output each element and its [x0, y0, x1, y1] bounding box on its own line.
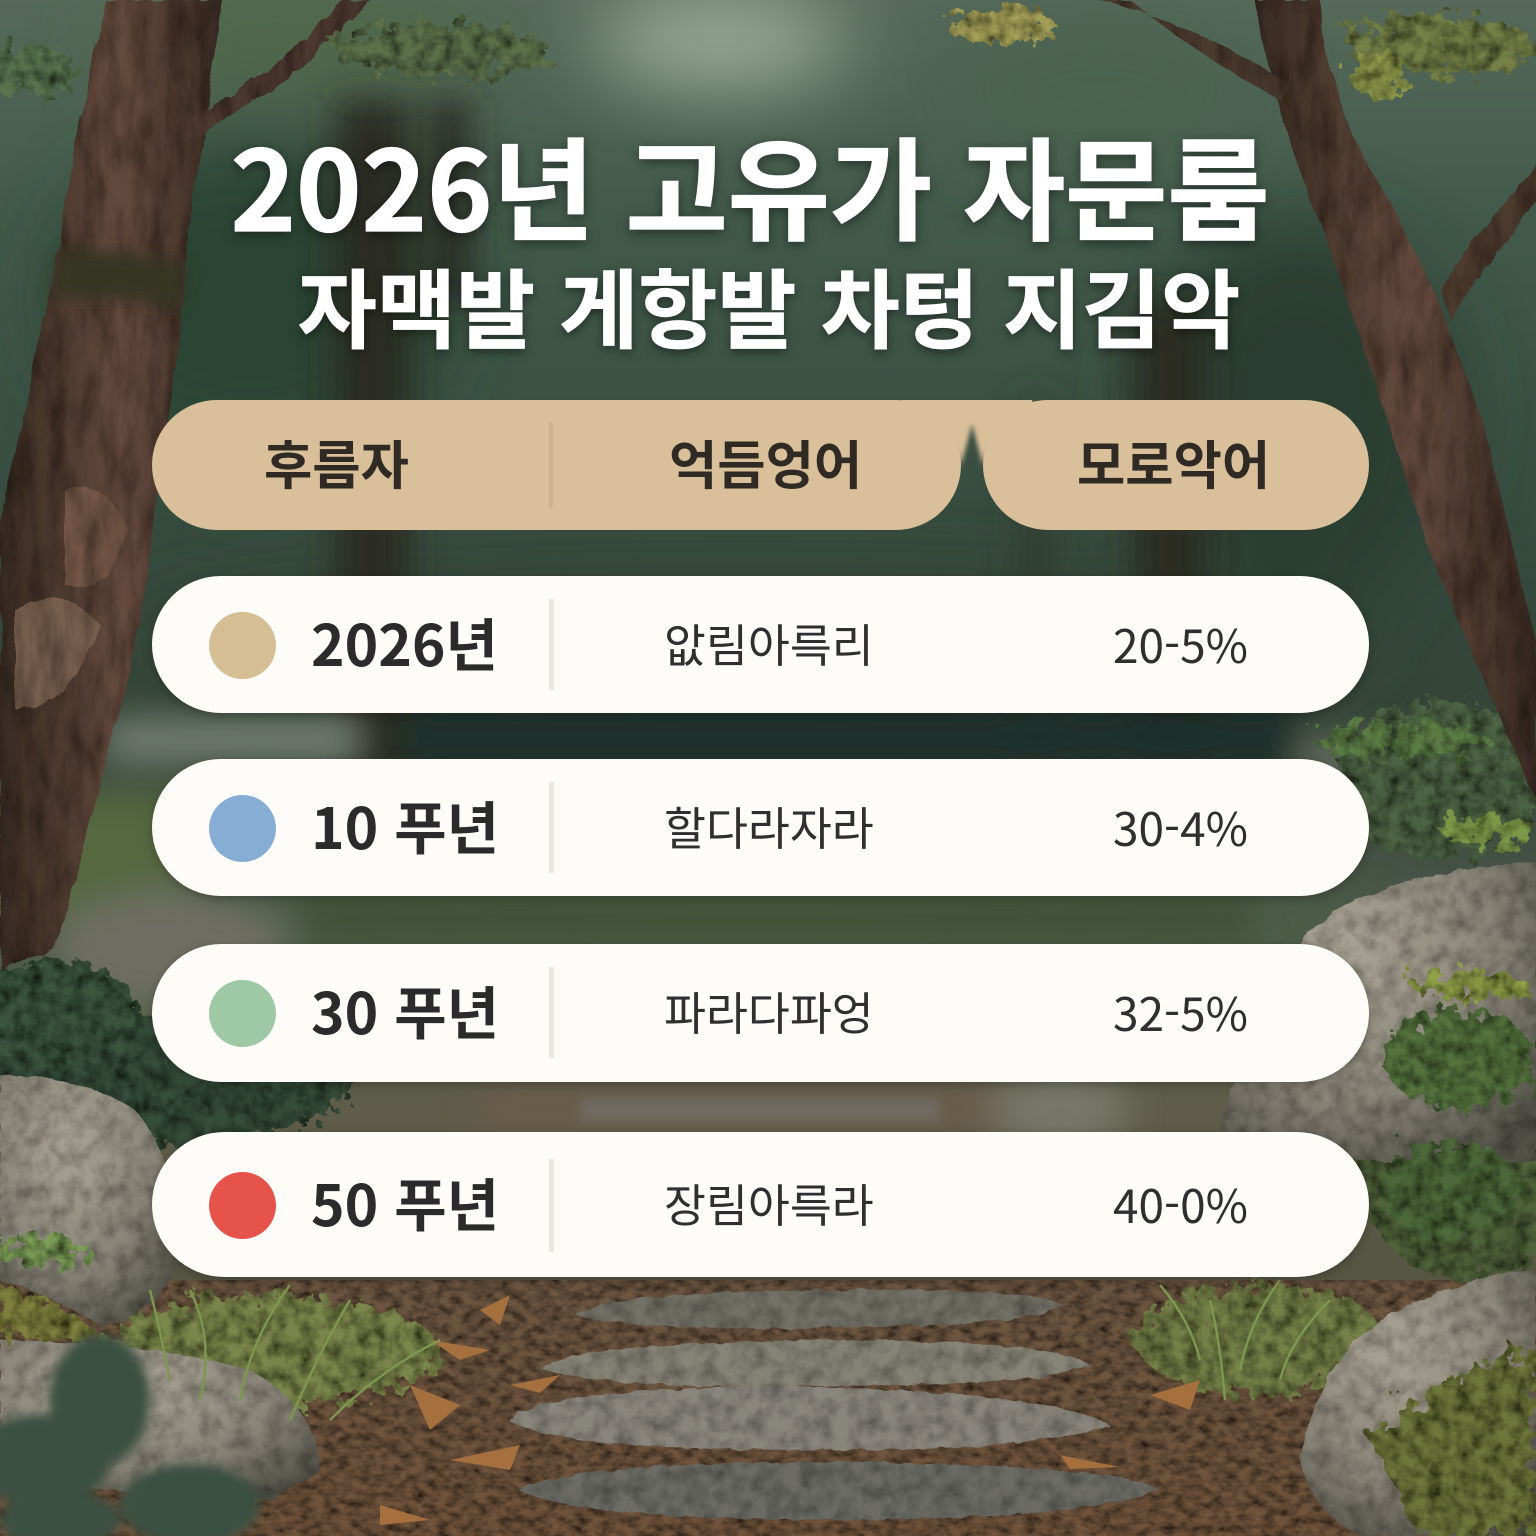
row label: 30 푸년	[311, 969, 499, 1051]
left tree	[0, 0, 1536, 970]
canopy leaves	[0, 7, 1535, 99]
row percent: 30-4%	[1113, 794, 1248, 860]
row: 50 푸년	[152, 1132, 1369, 1277]
title: 2026년 고유가 자문룸	[231, 102, 1269, 263]
row label: 2026년	[311, 601, 498, 683]
row percent: 32-5%	[1113, 979, 1248, 1045]
row label: 50 푸년	[311, 1161, 499, 1243]
row name: 앖림아륵리	[664, 610, 874, 676]
row: 10 푸년	[152, 759, 1369, 896]
distant stepping stones	[580, 1098, 940, 1122]
foreground plants	[0, 1335, 260, 1536]
rocks	[0, 862, 1536, 1536]
row label: 10 푸년	[311, 784, 499, 866]
green dot	[209, 980, 276, 1047]
header label: 후름자: 후름자	[264, 424, 409, 500]
leaves on path	[380, 1295, 1200, 1525]
header bridge	[902, 400, 1035, 466]
tan dot	[209, 612, 276, 679]
row name: 장림아륵라	[664, 1170, 874, 1236]
subtitle: 자맥발 게항발 차텅 지김악	[298, 241, 1240, 366]
row percent: 40-0%	[1113, 1171, 1248, 1237]
table header bar	[152, 400, 1369, 530]
row name: 파라다파엉	[664, 978, 874, 1044]
header label: 억듬엉어: 억듬엉어	[669, 424, 862, 500]
header label: 모로악어: 모로악어	[1077, 424, 1270, 500]
row: 30 푸년	[152, 944, 1369, 1082]
row percent: 20-5%	[1113, 611, 1248, 677]
blue dot	[209, 795, 276, 862]
header divider	[549, 422, 553, 508]
header pill: right column	[983, 400, 1369, 530]
red dot	[209, 1172, 276, 1239]
row name: 할다라자라	[664, 793, 874, 859]
ground	[0, 1280, 1536, 1536]
row: 2026년	[152, 576, 1369, 713]
right tree	[1255, 0, 1536, 800]
header pill: left and middle columns	[152, 400, 961, 530]
